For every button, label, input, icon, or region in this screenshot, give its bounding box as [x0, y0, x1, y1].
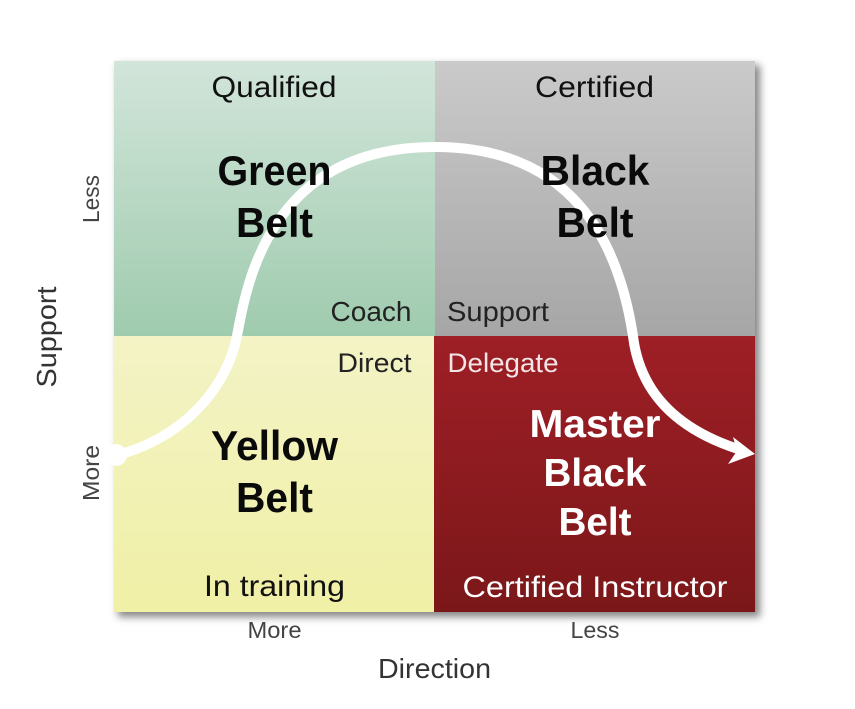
matrix drop shadow [118, 65, 760, 617]
label: black belt: Belt [556, 199, 634, 246]
label: master black belt: Belt [558, 501, 632, 544]
label: green belt: Green [218, 147, 332, 194]
y tick: more: More [78, 445, 104, 501]
heading: certified instructor: Certified Instructor [462, 571, 728, 604]
panel: master black belt background [434, 336, 755, 612]
style label: direct: Direct [338, 348, 412, 378]
label: master black belt: Black [544, 452, 647, 495]
panel: green belt background [114, 61, 435, 336]
label: yellow belt: Belt [236, 474, 313, 521]
label: black belt: Black [540, 147, 650, 194]
curve arrow [105, 147, 755, 466]
axis title: direction: Direction [378, 653, 491, 684]
axis title: support: Support [31, 286, 62, 388]
y tick: less: Less [78, 175, 104, 223]
panel: yellow belt background [114, 336, 434, 612]
label: master black belt: Master [530, 403, 660, 446]
style label: delegate: Delegate [448, 348, 558, 378]
panel: black belt background [435, 61, 755, 336]
style label: coach: Coach [330, 296, 412, 327]
style label: support: Support [447, 296, 549, 327]
x tick: more: More [248, 617, 302, 643]
label: yellow belt: Yellow [211, 422, 338, 469]
label: green belt: Belt [236, 199, 313, 246]
x tick: less: Less [570, 617, 620, 643]
heading: qualified: Qualified [212, 71, 336, 104]
heading: in training: In training [204, 570, 345, 603]
heading: certified: Certified [535, 71, 654, 104]
